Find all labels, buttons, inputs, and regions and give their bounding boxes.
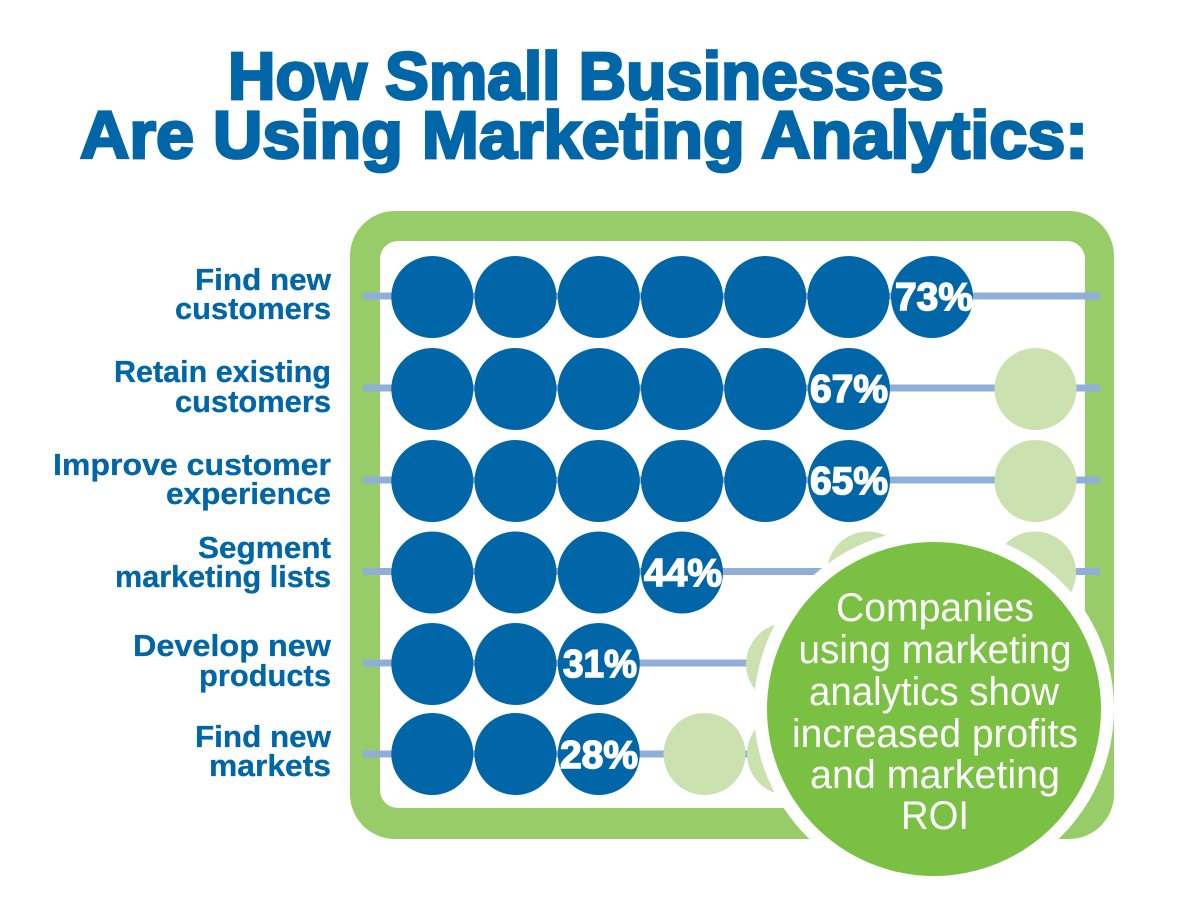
row 1: find new customers: Find new — [195, 262, 332, 297]
row 2: retain existing customers: customers — [175, 384, 331, 419]
title — [80, 39, 1088, 173]
row 5: develop new products — [133, 623, 828, 705]
row 2: retain existing customers: 67% — [810, 368, 888, 411]
callout: companies using marketing analytics: analytics show — [809, 670, 1059, 714]
row 3: improve customer experience: experience — [166, 476, 331, 511]
abacus rails — [363, 292, 1100, 758]
row 4: segment marketing lists: 44% — [644, 552, 722, 595]
row 6: find new markets: markets — [209, 748, 331, 783]
row 6: find new markets — [195, 713, 829, 795]
row 3: improve customer experience: Improve customer — [53, 447, 331, 482]
row 2: retain existing customers: Retain existing — [114, 354, 331, 389]
title: How Small Businesses — [228, 39, 944, 114]
callout: companies using marketing analytics: using marketing — [798, 628, 1072, 672]
row 1: find new customers — [175, 256, 973, 338]
row 5: develop new products: Develop new — [133, 628, 332, 663]
abacus frame — [350, 211, 1114, 839]
title: Are Using Marketing Analytics: — [80, 98, 1088, 173]
row 1: find new customers: customers — [175, 291, 331, 326]
callout: companies using marketing analytics: increased profits — [792, 712, 1078, 756]
row 1: find new customers: 73% — [895, 276, 973, 319]
row 3: improve customer experience — [53, 440, 1076, 522]
callout: companies using marketing analytics: and marketing — [810, 753, 1060, 797]
row 6: find new markets: Find new — [195, 719, 332, 754]
row 4: segment marketing lists — [115, 530, 1076, 614]
row 4: segment marketing lists: Segment — [198, 530, 331, 565]
row 2: retain existing customers — [114, 348, 1076, 430]
callout: companies using marketing analytics: Companies — [836, 586, 1034, 630]
row 4: segment marketing lists: marketing lists — [115, 559, 331, 594]
row 5: develop new products: products — [199, 658, 331, 693]
callout: companies using marketing analytics — [754, 529, 1114, 889]
row 5: develop new products: 31% — [563, 643, 637, 686]
row 6: find new markets: 28% — [560, 734, 638, 777]
row 3: improve customer experience: 65% — [810, 460, 888, 503]
callout: companies using marketing analytics: ROI — [901, 794, 969, 838]
